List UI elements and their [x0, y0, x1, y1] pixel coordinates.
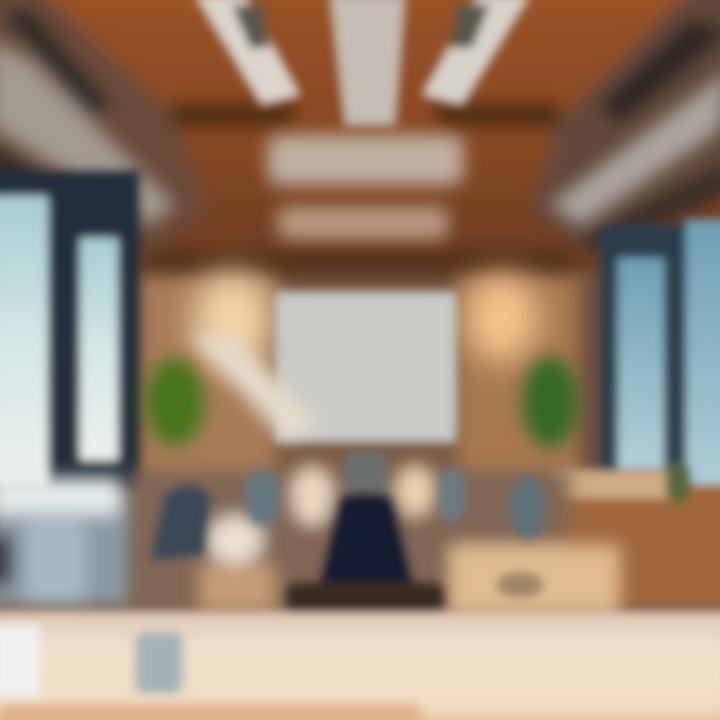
left side panels	[0, 40, 175, 225]
meeting table and chairs	[130, 464, 620, 615]
side wall columns	[140, 278, 608, 498]
ceiling side panels	[0, 10, 720, 255]
central chair	[285, 452, 445, 614]
plants	[145, 356, 578, 448]
left desk	[0, 478, 135, 605]
left windows	[0, 170, 140, 490]
wall lights	[194, 272, 538, 368]
presentation screen	[276, 292, 456, 442]
right windows	[600, 220, 720, 505]
foreground table	[0, 612, 720, 720]
side chairs	[150, 467, 546, 598]
ceiling light stripes	[195, 0, 530, 125]
ceiling	[0, 0, 720, 278]
ceiling central panels	[268, 135, 463, 239]
right cabinet	[552, 460, 720, 605]
right side panels	[550, 70, 720, 225]
light streak on left wall	[190, 335, 320, 440]
